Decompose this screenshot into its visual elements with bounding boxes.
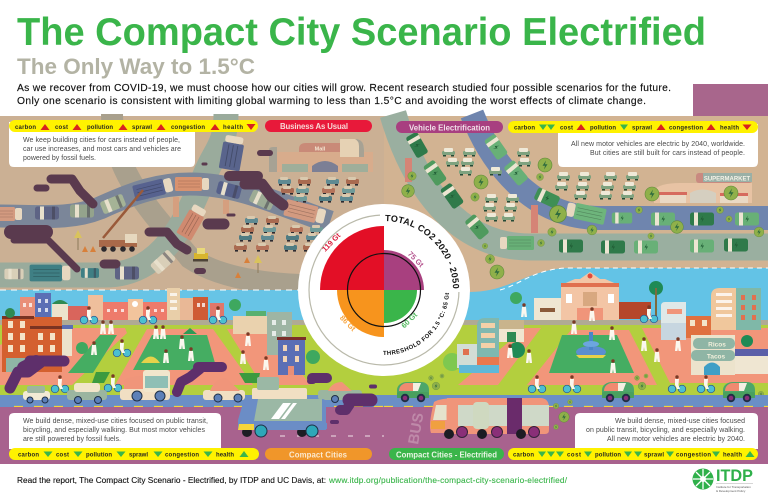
- indicator bar: congestion: [669, 126, 703, 132]
- indicator bar: sprawl: [632, 126, 652, 132]
- bulldozer: [193, 248, 208, 262]
- indicator bar: sprawl: [644, 452, 664, 458]
- scenario pill: compact cities electrified: [389, 448, 504, 460]
- sector labels: [320, 231, 426, 333]
- ITDP logo: [692, 466, 753, 493]
- chart: total CO2 circle: [298, 204, 470, 376]
- scenario pill: vehicle electrification: [396, 121, 503, 133]
- indicator bar: sprawl: [132, 125, 152, 131]
- small EV charging dots: [429, 374, 764, 397]
- description box: But cities are still built for cars instead of people.: [590, 150, 745, 157]
- orange sector: compact cities: [337, 290, 384, 337]
- indicator bar: cost: [56, 452, 69, 458]
- panel: business as usual: [0, 114, 384, 292]
- taco shop: [691, 335, 768, 375]
- indicator bar: pollution: [590, 126, 616, 132]
- charging icons near bus: [553, 400, 572, 429]
- description box: [575, 413, 758, 449]
- indicator bar: carbon: [514, 126, 535, 132]
- description box: [558, 124, 758, 167]
- panel: compact cities electrified: Compact Cities - Electrified: [396, 450, 497, 459]
- decorative purple block: [693, 84, 768, 118]
- green sector: compact cities electrified: [384, 290, 417, 323]
- title: The Compact City Scenario Electrified: [17, 11, 706, 54]
- indicator bar: [508, 121, 758, 133]
- indicator bar: pollution: [87, 125, 113, 131]
- panel: compact cities: [0, 288, 384, 464]
- description box: [9, 122, 195, 167]
- sector labels: 86 Gt: [338, 313, 358, 333]
- parked electric cars: [442, 148, 639, 222]
- ITDP logo: ITDP: [716, 466, 753, 485]
- description box: on public transit, bicycling, and especially walking.: [586, 427, 745, 434]
- hospital and city buildings: [534, 272, 761, 340]
- intro text: Only one scenario is consistent with limiting global warming to less than 1.5°C and avoiding the worst effects of climate change.: [17, 96, 646, 107]
- indicator bar: carbon: [18, 452, 39, 458]
- pedestrians and cyclists: [51, 306, 269, 393]
- curved headings: [383, 214, 460, 355]
- indicator bar: cost: [567, 452, 581, 458]
- pedestrians and cyclists: [507, 303, 715, 393]
- panel: compact cities electrified: [384, 268, 768, 464]
- purple smog: [10, 361, 375, 422]
- crosswalks: [92, 372, 260, 383]
- diesel bus: [238, 399, 327, 437]
- indicator bar: [9, 448, 259, 460]
- indicator bar: health: [723, 452, 742, 458]
- smog clouds: [11, 153, 283, 271]
- subtitle: The Only Way to 1.5°C: [17, 54, 255, 79]
- blue house: [277, 337, 306, 375]
- taco shop: Tacos: [707, 354, 726, 360]
- indicator bar: health: [720, 126, 739, 132]
- panel: compact cities: Compact Cities: [289, 450, 348, 459]
- indicator bar: [9, 120, 258, 132]
- cars: [23, 370, 362, 404]
- street and purple lane: [384, 395, 768, 407]
- description box: All new motor vehicles are electric by 2040, worldwide.: [571, 141, 745, 148]
- mall: [269, 139, 373, 172]
- electric articulated bus: [430, 398, 549, 439]
- electric vehicles on roads: [405, 131, 759, 254]
- palm and plants: [5, 299, 320, 364]
- sector labels: 60 Gt: [399, 310, 419, 330]
- roads: [393, 114, 768, 247]
- road vehicles: [0, 134, 327, 281]
- description box: We build dense, mixed-use cities focused on public transit,: [23, 418, 208, 425]
- indicator bar: sprawl: [129, 452, 148, 458]
- cones and signs: [74, 230, 262, 278]
- description box: car use increases, and most cars and vehicles are: [23, 146, 181, 153]
- footer text: www.itdp.org/publication/the-compact-city-scenario-electrified/: [328, 475, 568, 485]
- sector labels: 119 Gt: [320, 231, 343, 253]
- scenario pill: business as usual: [265, 120, 372, 132]
- intro text: As we recover from COVID-19, we must choose how our cities will grow. Recent research studied four possible scenarios for the future.: [17, 83, 671, 94]
- indicator bar: carbon: [15, 125, 36, 131]
- intro text: [17, 83, 671, 107]
- indicator bar: congestion: [165, 452, 199, 458]
- parked cars: [234, 177, 359, 252]
- plazas: [0, 328, 310, 385]
- purple sector: vehicle electrification: [384, 250, 424, 290]
- windows on skyline: [23, 293, 286, 336]
- panel: business as usual: Business As Usual: [280, 122, 348, 131]
- indicator bar: health: [223, 125, 243, 131]
- electric cars: [397, 382, 755, 402]
- threshold circle: [348, 254, 420, 326]
- plazas: [458, 328, 768, 385]
- indicator bar: health: [216, 452, 234, 458]
- ITDP logo: Institute for Transportation: [716, 485, 751, 489]
- panel: vehicle electrification: [384, 114, 768, 292]
- red sector: business as usual: [320, 226, 384, 290]
- pillars: [173, 197, 179, 217]
- curved headings: TOTAL CO2 2020 - 2050: [385, 214, 460, 288]
- ITDP logo: & Development Policy: [716, 489, 746, 493]
- scenario pill: compact cities: [265, 448, 372, 460]
- indicator bar: congestion: [676, 452, 711, 458]
- taco shop: Ricos: [708, 342, 726, 348]
- panel: vehicle electrification: Vehicle Electrification: [409, 123, 490, 132]
- indicator bar: [508, 448, 758, 460]
- skyline buildings: [20, 288, 292, 355]
- pillars: [405, 158, 412, 182]
- fountain: [576, 332, 606, 358]
- charging icons: [402, 158, 764, 279]
- roads: [0, 114, 330, 285]
- indicator bar: carbon: [513, 452, 534, 458]
- description box: We keep building cities for cars instead of people,: [23, 137, 180, 144]
- description box: All new motor vehicles are electric by 2040.: [607, 436, 745, 443]
- description box: bicycling, and especially walking. But most motor vehicles: [23, 427, 206, 434]
- indicator bar: pollution: [595, 452, 621, 458]
- teal corner building: [457, 318, 524, 373]
- indicator bar: pollution: [86, 452, 112, 458]
- supermarket: SUPERMARKET: [704, 176, 750, 182]
- description box: powered by fossil fuels.: [23, 155, 96, 162]
- bus lane marking: BUS: [405, 412, 427, 446]
- footer text: Read the report, The Compact City Scenario - Electrified, by ITDP and UC Davis, at:: [17, 475, 326, 485]
- sector labels: 75 Gt: [406, 249, 426, 269]
- description box: [9, 413, 221, 449]
- orange apartment: [2, 316, 73, 372]
- palm trees: [443, 281, 753, 371]
- curved headings: THRESHOLD FOR 1.5 °C: 65 Gt: [383, 292, 449, 355]
- mall: Mall: [315, 146, 326, 152]
- description box: We build dense, mixed-use cities focused: [615, 418, 745, 425]
- indicator bar: congestion: [171, 125, 205, 131]
- street and purple lane: [0, 395, 384, 407]
- crane truck: [99, 190, 143, 252]
- description box: are still powered by fossil fuels.: [23, 436, 121, 443]
- indicator bar: cost: [560, 126, 573, 132]
- footer text: [17, 475, 568, 485]
- indicator bar: cost: [55, 125, 68, 131]
- supermarket: [654, 173, 752, 203]
